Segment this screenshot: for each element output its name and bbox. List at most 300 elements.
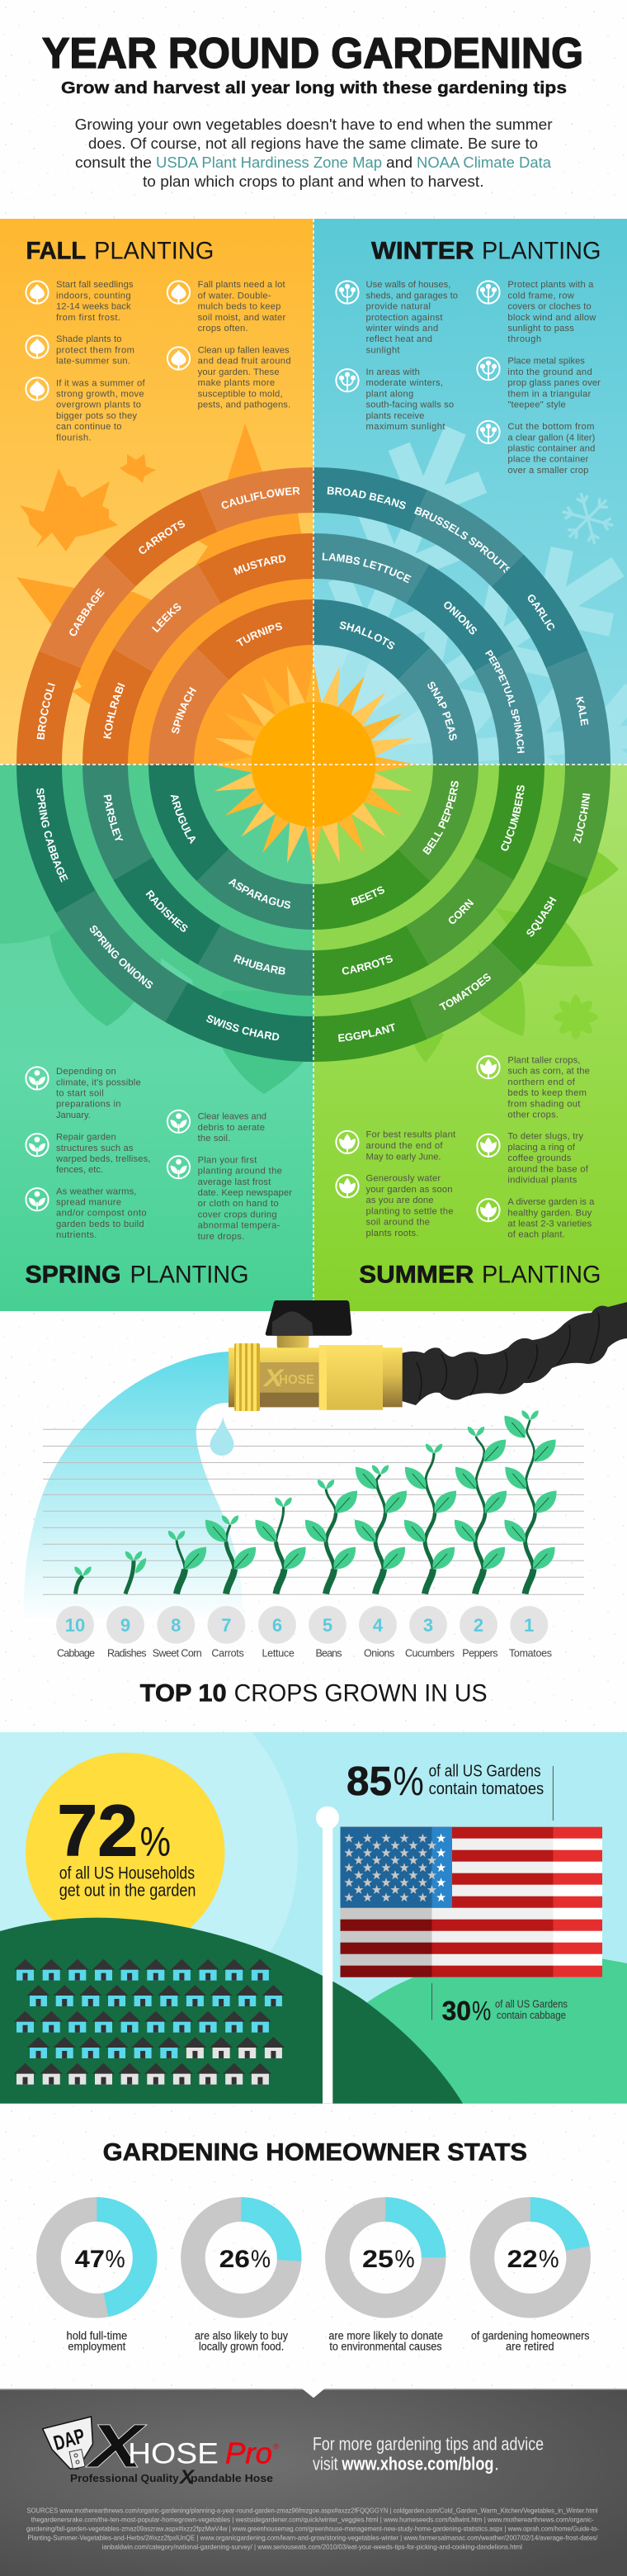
- ring: kale: KALE: [576, 697, 589, 726]
- crop rank badges: 2: [474, 1615, 483, 1636]
- donut: 22 percent: are retired: [506, 2341, 554, 2353]
- ring: cabbage: [40, 555, 135, 668]
- ring: beets: BEETS: [351, 887, 384, 906]
- ring: leeks: [114, 565, 221, 672]
- ring: radishes: [114, 857, 221, 964]
- ring: kohlrabi: KOHLRABI: [103, 682, 125, 739]
- winter tip 4: "teepee" style: [507, 400, 566, 410]
- heading: fall planting: PLANTING: [94, 237, 214, 264]
- ring: turnips: [196, 599, 314, 680]
- fall tip 4: crops often.: [198, 324, 248, 334]
- donut: 47 percent: hold full-time: [66, 2329, 127, 2342]
- spring tip 5: planting around the: [198, 1167, 282, 1177]
- ring: shallots: [314, 599, 431, 680]
- panel: spring background: [0, 765, 314, 1311]
- winter tip 3: sunlight to pass: [507, 324, 574, 334]
- winter tip 4: Place metal spikes: [507, 357, 585, 367]
- fall tip 3: overgrown plants to: [56, 400, 141, 410]
- panel: household statistics: [0, 1732, 627, 2104]
- ring: bell peppers: BELL PEPPERS: [422, 781, 459, 855]
- ring: cabbage: CABBAGE: [69, 588, 105, 636]
- ring: shallots: SHALLOTS: [340, 621, 394, 649]
- ring: zucchini: ZUCCHINI: [573, 793, 591, 844]
- ring: broccoli: [16, 651, 81, 765]
- end fitting: [383, 1347, 403, 1407]
- crop names: Sweet Corn: [153, 1648, 202, 1660]
- sources: ianbaldwin.com/category/national-gardening-survey/ | www.seriouseats.com/2010/03/eat-your-weeds-tips-for-picking-and-cooking-dandelions.html: [102, 2543, 522, 2551]
- fall crop rings: [16, 467, 314, 765]
- ring: spring cabbage: [16, 765, 96, 913]
- summer tip 3: northern end of: [507, 1077, 576, 1087]
- summer tip 4: To deter slugs, try: [507, 1132, 583, 1142]
- crop rank badges: 4: [373, 1615, 384, 1636]
- fall tip 3: bigger pots so they: [56, 411, 137, 421]
- plant 8 sweet corn: [168, 1531, 206, 1593]
- fall tip 2: [26, 334, 134, 367]
- heading: gardening homeowner stats: GARDENING HOMEOWNER STATS: [103, 2139, 527, 2166]
- ring: arugula: ARUGULA: [170, 795, 196, 844]
- ring: onions: [406, 565, 513, 672]
- donut: 22 percent: %: [539, 2246, 559, 2273]
- stat: 85 percent: %: [393, 1759, 424, 1804]
- valve handle: [266, 1300, 352, 1336]
- ring: corn: CORN: [449, 898, 474, 924]
- ring: cauliflower: CAULIFLOWER: [221, 487, 300, 509]
- stat: 30 percent: of all US Gardens: [495, 1998, 568, 2010]
- donut: 47 percent: employment: [68, 2341, 125, 2353]
- spring text: [25, 1067, 292, 1288]
- spring tip 1: preparations in: [56, 1100, 120, 1110]
- summer tip 3: beds to keep them: [507, 1088, 587, 1098]
- donut: 25 percent: to environmental causes: [329, 2341, 442, 2353]
- crop names: Radishes: [107, 1648, 147, 1660]
- summer tip 3: [477, 1055, 590, 1120]
- logo: tagline: pandable Hose: [191, 2472, 273, 2484]
- ring: brussels sprouts: [409, 490, 523, 586]
- winter tip 1: reflect heat and: [366, 334, 432, 344]
- flagpole: [316, 1807, 339, 2104]
- winter tip 2: plants receive: [366, 411, 424, 421]
- ring: lambs lettuce: [314, 533, 429, 604]
- heading: top 10 crops: TOP 10: [140, 1679, 227, 1707]
- sources: [26, 2507, 599, 2551]
- crop names: Onions: [364, 1648, 394, 1660]
- donut: 25 percent: are more likely to donate: [328, 2329, 443, 2342]
- fall tip 1: indoors, counting: [56, 291, 131, 301]
- fall tip 5: Clean up fallen leaves: [198, 345, 290, 355]
- crop rank badges: 6: [272, 1615, 282, 1636]
- hose: [399, 1302, 627, 1405]
- ring: garlic: GARLIC: [528, 594, 554, 631]
- fall tip 4: of water. Double-: [198, 291, 271, 301]
- ring: rhubarb: [198, 926, 314, 996]
- fall tip 5: make plants more: [198, 378, 275, 388]
- summer tip 1: [336, 1130, 456, 1162]
- logo: x: X: [85, 2412, 148, 2480]
- ring: broad beans: [314, 467, 427, 532]
- stat: 72 percent: [57, 1789, 196, 1901]
- winter tip 2: plant along: [366, 390, 413, 400]
- crop rank badges: 3: [423, 1615, 433, 1636]
- winter tip 1: provide natural: [366, 302, 431, 312]
- winter tip 2: south-facing walls so: [366, 400, 454, 410]
- winter tip 3: Protect plants with a: [507, 280, 594, 290]
- winter tip 5: place the container: [507, 454, 589, 464]
- ring: swiss chard: [165, 983, 314, 1062]
- spring tip 2: structures such as: [56, 1144, 134, 1153]
- winter tip 1: Use walls of houses,: [366, 280, 450, 290]
- heading: fall planting: FALL: [26, 237, 86, 264]
- xhose mark: [262, 1365, 314, 1392]
- summer tip 5: at least 2-3 varieties: [507, 1219, 592, 1229]
- heading: summer planting: SUMMER: [359, 1261, 474, 1288]
- call to action: [313, 2433, 544, 2474]
- fall tip 2: protect them from: [56, 345, 134, 355]
- donut: 26 percent: [193, 2209, 290, 2353]
- ring: spinach: [148, 648, 229, 765]
- fall tip 2: Shade plants to: [56, 334, 122, 344]
- stat: 72 percent: %: [140, 1818, 171, 1864]
- spring crop rings: [16, 765, 314, 1062]
- brass body: [229, 1347, 319, 1407]
- crop rank badges: 10: [65, 1615, 85, 1636]
- ring: zucchini: [546, 765, 610, 878]
- intro paragraph: NOAA Climate Data: [417, 154, 552, 171]
- winter tip 4: [477, 357, 601, 410]
- title: YEAR ROUND GARDENING: [42, 30, 583, 78]
- ring: swiss chard: SWISS CHARD: [206, 1016, 279, 1040]
- logo: tagline: X: [178, 2466, 196, 2488]
- winter tip 3: [477, 280, 596, 344]
- fall tip 5: pests, and pathogens.: [198, 400, 290, 410]
- ring: squash: SQUASH: [526, 897, 556, 936]
- logo: tagline: Professional Quality: [70, 2472, 180, 2484]
- ring: cucumbers: [474, 765, 544, 880]
- header block: [42, 30, 583, 190]
- summer tip 3: Plant taller crops,: [507, 1055, 580, 1065]
- winter tip 4: them in a triangular: [507, 390, 591, 400]
- spring tip 3: garden beds to build: [56, 1219, 144, 1229]
- collar: [319, 1345, 383, 1410]
- fall tip 1: from first frost.: [56, 313, 120, 323]
- ring: parsley: PARSLEY: [104, 794, 124, 841]
- summer tip 2: planting to settle the: [366, 1207, 454, 1217]
- crop rank badges: 8: [171, 1615, 181, 1636]
- subtitle: Grow and harvest all year long with these gardening tips: [61, 79, 567, 97]
- valve stem: [277, 1333, 309, 1352]
- summer tip 2: as you are done: [366, 1196, 434, 1205]
- stat: 72 percent: get out in the garden: [59, 1882, 196, 1901]
- summer tip 3: from shading out: [507, 1099, 581, 1109]
- fall tip 3: If it was a summer of: [56, 378, 145, 388]
- plant 3 cucumbers: [404, 1444, 456, 1593]
- crop names: Tomatoes: [509, 1648, 552, 1660]
- donut: 25 percent: 25: [362, 2246, 394, 2273]
- intro paragraph: and: [386, 154, 412, 171]
- spring tip 3: nutrients.: [56, 1230, 97, 1240]
- footer: [0, 2389, 627, 2576]
- plant 7 carrots: [205, 1515, 256, 1593]
- winter tip 1: sunlight: [366, 345, 400, 355]
- spring tip 4: the soil.: [198, 1134, 230, 1144]
- stat: 30 percent: %: [472, 1996, 491, 2026]
- stat: 85 percent: of all US Gardens: [429, 1763, 541, 1781]
- donut: 25 percent: %: [394, 2246, 415, 2273]
- spring tip 5: Plan your first: [198, 1155, 257, 1165]
- stat: 30 percent: 30: [442, 1996, 471, 2026]
- donut: 47 percent: [49, 2209, 145, 2353]
- ring: cucumbers: CUCUMBERS: [501, 785, 525, 850]
- intro paragraph: to plan which crops to plant and when to harvest.: [143, 173, 483, 190]
- winter tip 3: through: [507, 334, 541, 344]
- summer tip 5: of each plant.: [507, 1230, 565, 1240]
- ring: beets: [314, 849, 431, 930]
- winter tip 4: prop glass panes over: [507, 378, 601, 388]
- sun: [211, 662, 416, 867]
- plant 4 onions: [355, 1466, 407, 1593]
- summer tip 2: plants roots.: [366, 1229, 419, 1238]
- summer tip 4: placing a ring of: [507, 1143, 576, 1153]
- spring tip 3: and/or compost onto: [56, 1209, 147, 1219]
- panel: fall background: [0, 219, 314, 765]
- ring: cauliflower: [200, 467, 314, 532]
- heading: summer planting: PLANTING: [482, 1261, 601, 1288]
- sources: Planting-Summer-Vegetables-and-Herbs/2#ixzz2fpxlUnQE | www.organicgardening.com/learn-and-grow/storing-vegetables-winter | www.farmersalmanac.com/weather/2007/02/14/average-frost-dates/: [27, 2534, 598, 2542]
- ring: garlic: [492, 555, 587, 669]
- summer tip 3: such as corn, at the: [507, 1067, 590, 1077]
- summer tip 1: May to early June.: [366, 1152, 441, 1162]
- spring tip 4: debris to aerate: [198, 1123, 265, 1133]
- ring: kale: [546, 651, 610, 765]
- threaded coupling: [234, 1343, 260, 1411]
- ring: spring onions: SPRING ONIONS: [89, 925, 153, 989]
- ring: onions: ONIONS: [444, 601, 477, 634]
- ring: eggplant: EGGPLANT: [338, 1023, 394, 1042]
- fall tip 5: [167, 345, 291, 410]
- stat: 85 percent: contain tomatoes: [429, 1780, 544, 1798]
- crop names: Peppers: [462, 1648, 498, 1660]
- crop rank badges: 7: [221, 1615, 232, 1636]
- winter tip 5: Cut the bottom from: [507, 422, 594, 432]
- crop names: Cabbage: [57, 1648, 95, 1660]
- plant 6 lettuce: [255, 1498, 306, 1593]
- xhose mark: X: [262, 1365, 285, 1392]
- ring: corn: [406, 857, 513, 964]
- summer tip 2: [336, 1174, 454, 1238]
- winter tip 2: maximum sunlight: [366, 422, 446, 432]
- heading: fall planting: [26, 237, 214, 264]
- donut: 26 percent: %: [251, 2246, 271, 2273]
- ring: parsley: [82, 765, 153, 880]
- summer tip 4: around the base of: [507, 1164, 589, 1174]
- winter tip 2: In areas with: [366, 367, 420, 377]
- crop names: Cucumbers: [405, 1648, 455, 1660]
- ring: mustard: MUSTARD: [233, 555, 285, 575]
- ring: turnips: TURNIPS: [236, 623, 282, 646]
- donut: 47 percent: %: [106, 2246, 125, 2273]
- fall tip 5: susceptible to mold,: [198, 390, 283, 400]
- summer tip 2: your garden as soon: [366, 1185, 452, 1195]
- fall tip 4: soil moist, and water: [198, 313, 285, 323]
- crop names: Beans: [315, 1648, 342, 1660]
- donut: 26 percent: 26: [219, 2246, 250, 2273]
- summer tip 3: other crops.: [507, 1110, 559, 1120]
- summer tip 5: healthy garden. Buy: [507, 1208, 592, 1218]
- ring: bell peppers: [398, 765, 478, 882]
- chart grid lines: [43, 1429, 584, 1594]
- fall tip 5: and dead fruit around: [198, 357, 291, 367]
- crop rank badges: 9: [120, 1615, 130, 1636]
- stat: 30 percent: contain cabbage: [497, 2009, 566, 2021]
- dark green hill: [0, 1918, 463, 2104]
- donut: 22 percent: of gardening homeowners: [471, 2329, 590, 2342]
- heading: top 10 crops: CROPS GROWN IN US: [234, 1679, 488, 1707]
- ring: squash: [492, 860, 587, 974]
- ring: rhubarb: RHUBARB: [233, 954, 285, 974]
- stat: 85 percent: 85: [346, 1759, 392, 1804]
- spring tip 1: climate, it's possible: [56, 1077, 141, 1087]
- logo: dap xhose pro: [43, 2412, 279, 2488]
- sources: thegardenersrake.com/the-ten-most-popular-homegrown-vegetables | westsidegardener.com/quick/winter_veggies.html | www.humeseeds.com/fallwint.htm | www.motherearthnews.com/organic-: [31, 2516, 594, 2524]
- logo: dap shield: [43, 2417, 92, 2469]
- winter tip 1: protection against: [366, 313, 443, 323]
- winter tip 1: winter winds and: [365, 324, 438, 334]
- spring tip 2: [26, 1133, 150, 1175]
- donut: 47 percent: 47: [75, 2246, 105, 2273]
- spring tip 4: Clear leaves and: [198, 1112, 266, 1122]
- spring tip 5: ture drops.: [198, 1232, 244, 1242]
- panel: summer background: [314, 765, 627, 1311]
- water droplet: [210, 1417, 234, 1456]
- spring tip 3: spread manure: [56, 1198, 121, 1208]
- spring tip 3: [26, 1186, 147, 1240]
- heading: summer planting: [359, 1261, 601, 1288]
- ring: perpetual spinach: PERPETUAL SPINACH: [485, 650, 525, 753]
- ring: perpetual spinach: [474, 649, 544, 765]
- fall tip 4: mulch beds to keep: [198, 302, 280, 312]
- fall tip 3: flourish.: [56, 433, 92, 443]
- crop rank badges: 5: [323, 1615, 332, 1636]
- plant 2 peppers: [455, 1427, 507, 1593]
- logo: dap shield: DAP: [51, 2424, 87, 2455]
- intro paragraph: consult the: [75, 154, 152, 171]
- donut: 26 percent: are also likely to buy: [195, 2329, 288, 2342]
- plant 1 tomatoes: [504, 1410, 557, 1593]
- spring tip 4: [167, 1110, 266, 1144]
- logo: tagline: [70, 2466, 273, 2488]
- panel: winter background: [314, 219, 627, 765]
- spring tip 1: [26, 1067, 141, 1120]
- ring: spring cabbage: SPRING CABBAGE: [36, 788, 68, 883]
- logo: pro: ®: [273, 2442, 279, 2451]
- donut: 26 percent: locally grown food.: [199, 2341, 284, 2353]
- spring tip 3: As weather warms,: [56, 1186, 136, 1196]
- summer tip 2: soil around the: [366, 1218, 430, 1228]
- stat: 85 percent: [346, 1759, 544, 1804]
- stat: 30 percent: [442, 1996, 568, 2026]
- ring: carrots: [104, 490, 218, 586]
- winter tip 5: [477, 421, 596, 476]
- ring: radishes: RADISHES: [145, 890, 188, 932]
- fall tip 3: can continue to: [56, 422, 122, 432]
- summer tip 4: coffee grounds: [507, 1153, 572, 1163]
- summer tip 1: around the end of: [366, 1141, 443, 1151]
- winter tip 5: plastic container and: [507, 443, 595, 453]
- winter tip 2: moderate winters,: [366, 378, 443, 388]
- intro paragraph: [75, 116, 553, 190]
- winter crop rings: [314, 467, 610, 765]
- fall tip 3: strong growth, move: [56, 390, 144, 400]
- heading: spring planting: SPRING: [25, 1261, 120, 1288]
- xhose mark: HOSE: [279, 1373, 314, 1387]
- call to action: visit: [313, 2454, 338, 2474]
- donut: 25 percent: [328, 2209, 443, 2353]
- spring tip 5: date. Keep newspaper: [198, 1188, 292, 1198]
- spring tip 2: fences, etc.: [56, 1165, 103, 1175]
- ring: asparagus: [196, 849, 314, 930]
- bar chart: plants: [74, 1410, 557, 1593]
- summer tip 2: Generously water: [366, 1174, 441, 1184]
- spring tip 5: average last frost: [198, 1177, 271, 1187]
- donut: 22 percent: [471, 2209, 590, 2353]
- spring tip 5: [167, 1155, 292, 1242]
- logo: pro: Pro: [225, 2436, 272, 2469]
- light green hill: [346, 1952, 627, 2104]
- call to action: www.xhose.com/blog: [342, 2454, 493, 2474]
- spring tip 1: January.: [56, 1110, 91, 1120]
- water stream: [24, 1352, 243, 1622]
- summer tip 5: [477, 1197, 595, 1240]
- fall tip 4: [167, 280, 285, 334]
- spring tip 5: abnormal tempera-: [198, 1221, 280, 1231]
- fall tip 1: [26, 280, 134, 323]
- crop names: [57, 1648, 552, 1660]
- fall tip 2: late-summer sun.: [56, 357, 130, 367]
- crop names: Carrots: [211, 1648, 244, 1660]
- intro paragraph: Growing your own vegetables doesn't have to end when the summer: [75, 116, 553, 133]
- ring: broad beans: BROAD BEANS: [327, 487, 406, 509]
- brass nozzle and valve: [229, 1300, 403, 1411]
- winter tip 5: over a smaller crop: [507, 466, 588, 476]
- call to action: .: [494, 2454, 499, 2474]
- ring: kohlrabi: [82, 649, 153, 765]
- heading: spring planting: PLANTING: [130, 1261, 249, 1288]
- american flag: [340, 1827, 602, 1977]
- ring: brussels sprouts: BRUSSELS SPROUTS: [414, 507, 510, 573]
- ring: asparagus: ASPARAGUS: [228, 878, 290, 908]
- spring tip 5: or cloth on hand to: [198, 1199, 279, 1209]
- ring: tomatoes: [409, 943, 523, 1039]
- plant 9 radishes: [125, 1551, 146, 1593]
- fall tip 1: 12-14 weeks back: [56, 302, 131, 312]
- heading: winter planting: PLANTING: [482, 237, 601, 264]
- spring tip 1: Depending on: [56, 1067, 116, 1077]
- winter tip 4: into the ground and: [507, 367, 592, 377]
- winter text: [336, 237, 601, 476]
- ring: carrots: CARROTS: [139, 520, 185, 554]
- heading: spring planting: [25, 1261, 249, 1288]
- plant 10 cabbage: [74, 1566, 92, 1593]
- stat: 72 percent: of all US Households: [59, 1864, 195, 1883]
- intro paragraph: does. Of course, not all regions have the same climate. Be sure to: [88, 135, 538, 152]
- heading: winter planting: WINTER: [371, 237, 474, 264]
- fall tip 3: [26, 377, 145, 443]
- ring: spinach: SPINACH: [172, 687, 196, 734]
- fall tip 4: Fall plants need a lot: [198, 280, 285, 290]
- ring: mustard: [198, 533, 314, 604]
- summer tip 4: individual plants: [507, 1176, 578, 1186]
- winter tip 3: cold frame, row: [507, 291, 575, 301]
